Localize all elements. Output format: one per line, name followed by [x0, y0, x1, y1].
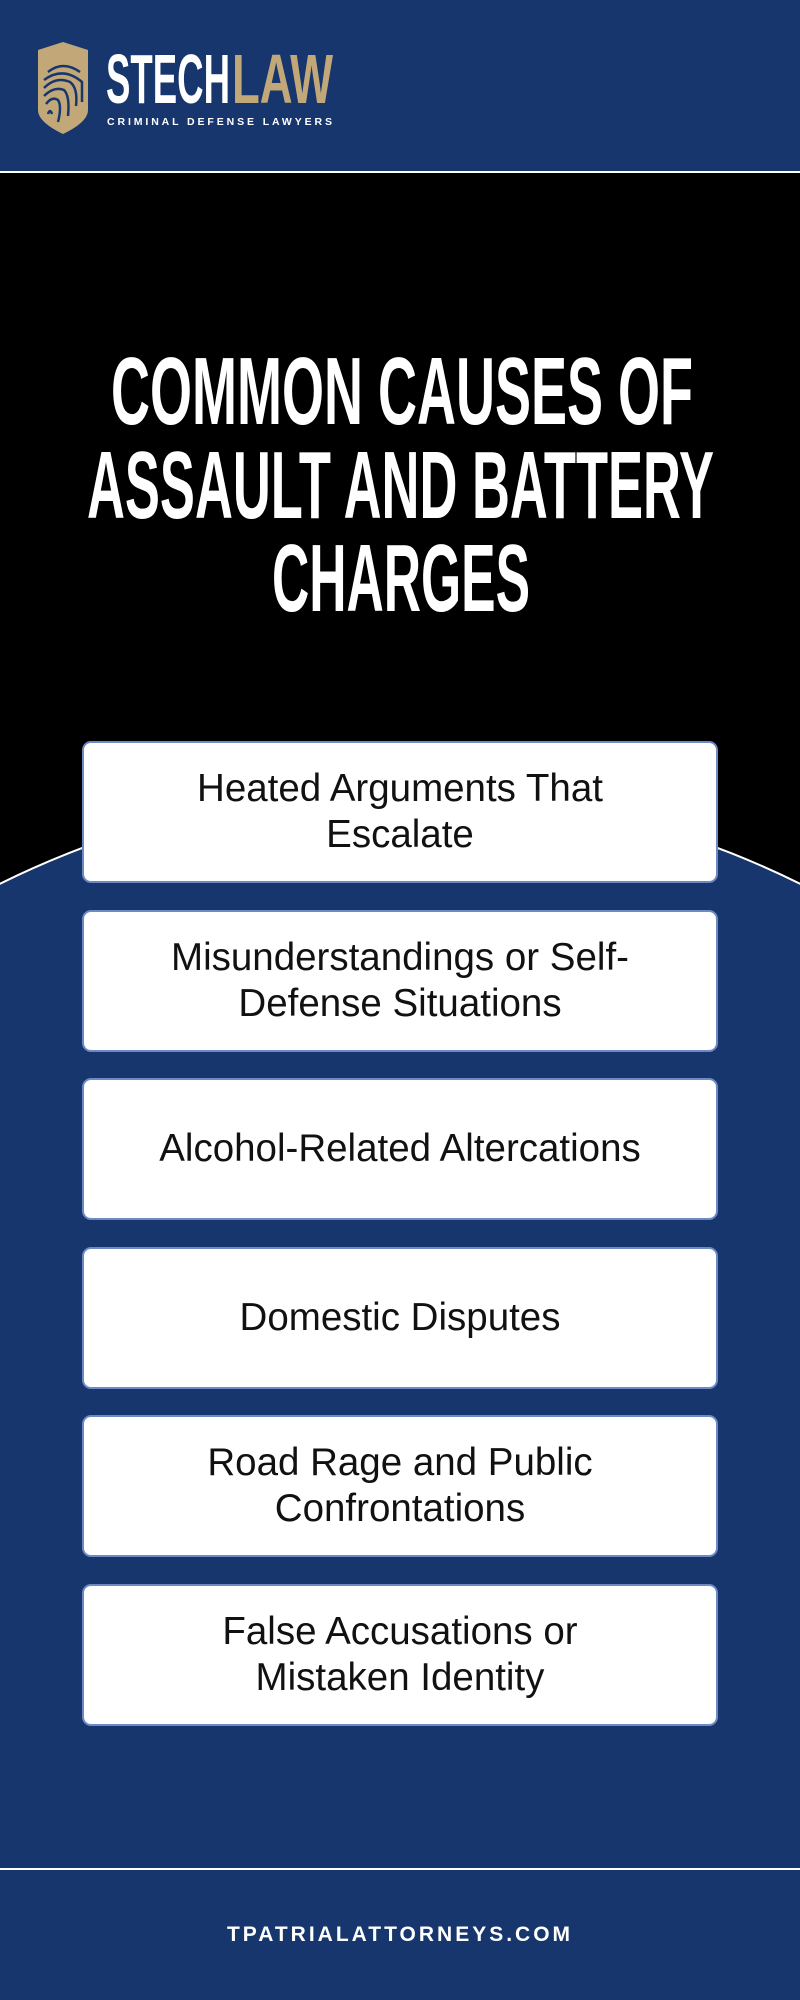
card 5: [82, 1415, 718, 1557]
header logo: [38, 42, 333, 134]
card 2: [82, 910, 718, 1052]
card 5: Road Rage and Public Confrontations: [207, 1441, 593, 1530]
card 4: Domestic Disputes: [240, 1296, 560, 1339]
card 6: [82, 1584, 718, 1726]
card 1: [82, 741, 718, 883]
title: [87, 338, 714, 630]
footer url: TPATRIALATTORNEYS.COM: [227, 1923, 573, 1946]
card 4: [82, 1247, 718, 1389]
card 3: Alcohol-Related Altercations: [159, 1127, 641, 1170]
icon: fingerprint shield: [38, 42, 88, 134]
title: CHARGES: [272, 525, 530, 630]
card 3: [82, 1078, 718, 1220]
card 1: Heated Arguments That Escalate: [197, 767, 603, 856]
logo wordmark: CRIMINAL DEFENSE LAWYERS: [107, 116, 332, 128]
card 2: Misunderstandings or Self-Defense Situations: [171, 936, 629, 1025]
card 6: False Accusations or Mistaken Identity: [222, 1610, 578, 1699]
